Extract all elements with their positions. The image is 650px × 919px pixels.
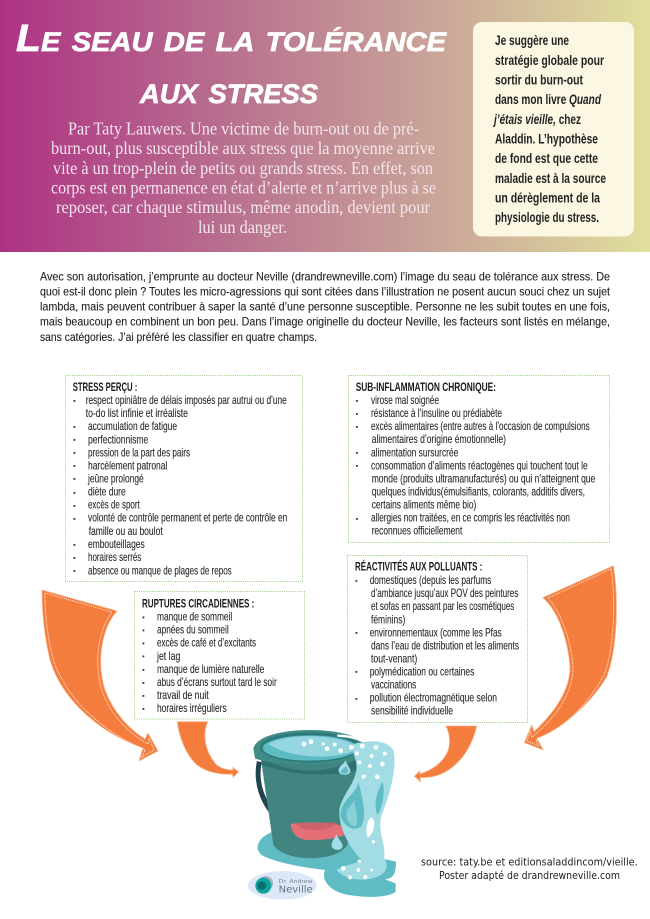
intro text: vite à un trop-plein de petits ou grands stress. En effet, son xyxy=(53,158,433,178)
panel: réactivités aux polluants xyxy=(348,556,528,722)
paragraph: sans catégories. J’ai préféré les classifier en quatre champs. xyxy=(40,330,317,344)
panel: ruptures circadiennes: excès de café et d’excitants xyxy=(157,636,256,650)
source credit: Poster adapté de drandrewneville.com xyxy=(439,870,620,882)
callout: book: de fond est que cette xyxy=(495,150,598,166)
panel: sub-inflammation chronique: alimentation sursurcrée xyxy=(371,445,459,459)
callout: book: maladie est à la source xyxy=(495,170,606,186)
panel: ruptures circadiennes: jet lag xyxy=(156,649,180,663)
source credit: source: taty.be et editionsaladdincom/vieille. xyxy=(421,857,638,869)
panel: ruptures circadiennes: apnées du sommeil xyxy=(157,623,229,637)
title: aux stress xyxy=(139,70,318,112)
source credit xyxy=(421,857,638,882)
panel: stress perçu: pression de la part des pairs xyxy=(88,445,190,459)
pink band xyxy=(291,822,347,840)
arrow: left large xyxy=(42,590,158,761)
panel: sub-inflammation chronique: certains aliments même bio) xyxy=(372,498,476,512)
panel: réactivités aux polluants: tout-venant) xyxy=(371,651,417,665)
arrow: right large xyxy=(524,566,616,750)
panel: réactivités aux polluants: RÉACTIVITÉS AUX POLLUANTS : xyxy=(355,559,482,574)
panel: stress perçu: respect opiniâtre de délais imposés par autrui ou d’une xyxy=(86,393,287,407)
panel: sub-inflammation chronique: SUB-INFLAMMATION CHRONIQUE: xyxy=(356,380,496,394)
panel: réactivités aux polluants: domestiques (depuis les parfums xyxy=(370,573,491,587)
title: Le seau de la tolérance xyxy=(16,18,447,60)
panel: stress perçu: jeûne prolongé xyxy=(87,471,144,485)
logo: Dr. Andrew Neville: Dr. Andrew xyxy=(279,879,313,885)
panel: stress perçu: perfectionnisme xyxy=(88,432,149,446)
panel: ruptures circadiennes: abus d’écrans surtout tard le soir xyxy=(157,675,277,689)
panel: stress perçu: horaires serrés xyxy=(88,550,141,564)
panel: stress perçu: embouteillages xyxy=(88,537,145,551)
panel: réactivités aux polluants: environnementaux (comme les Pfas xyxy=(370,625,502,639)
logo: Dr. Andrew Neville xyxy=(248,871,317,900)
callout: book: stratégie globale pour xyxy=(495,52,604,68)
intro text xyxy=(51,118,436,237)
logo: Dr. Andrew Neville: Neville xyxy=(279,884,313,895)
callout: book: physiologie du stress. xyxy=(495,209,599,225)
callout: book xyxy=(473,22,634,236)
panel: sub-inflammation chronique: reconnues officiellement xyxy=(372,524,463,538)
panel: réactivités aux polluants: d’ambiance jusqu’aux POV des peintures xyxy=(371,586,518,600)
panel: stress perçu: accumulation de fatigue xyxy=(88,419,177,433)
foam bubbles xyxy=(302,739,387,879)
callout: book: Je suggère une xyxy=(495,32,569,48)
callout: book: sortir du burn-out xyxy=(495,72,583,88)
panel: stress perçu: absence ou manque de plages de repos xyxy=(88,563,232,577)
panel: réactivités aux polluants: vaccinations xyxy=(371,678,416,692)
panel: stress perçu: diète dure xyxy=(88,485,126,499)
callout: book: Aladdin. L’hypothèse xyxy=(495,130,598,146)
paragraph xyxy=(40,269,611,344)
panel: stress perçu: excès de sport xyxy=(88,498,140,512)
arrow: left small xyxy=(177,722,239,777)
arrow: right small xyxy=(414,726,477,782)
panel: sub-inflammation chronique xyxy=(348,376,610,542)
callout: book: dans mon livre Quand xyxy=(495,91,601,107)
rim xyxy=(253,730,367,764)
paragraph: Avec son autorisation, j’emprunte au docteur Neville (drandrewneville.com) l’image du seau de tolérance aux stress. De xyxy=(40,269,610,283)
panel: stress perçu: to-do list infinie et irréaliste xyxy=(86,406,188,420)
panel: réactivités aux polluants: sensibilité individuelle xyxy=(371,704,453,718)
panel: ruptures circadiennes: manque de sommeil xyxy=(157,610,232,624)
intro text: corps est en permanence en état d’alerte et n’arrive plus à se xyxy=(51,178,436,198)
callout: book: un dérèglement de la xyxy=(495,190,600,206)
panel: ruptures circadiennes xyxy=(134,592,304,719)
intro text: Par Taty Lauwers. Une victime de burn-out ou de pré- xyxy=(68,118,419,138)
panel: ruptures circadiennes: RUPTURES CIRCADIENNES : xyxy=(142,596,254,610)
panel: stress perçu: harcèlement patronal xyxy=(88,458,167,472)
icon: overflowing bucket xyxy=(248,730,396,900)
panel: stress perçu xyxy=(66,376,302,582)
intro text: burn-out, plus susceptible aux stress que la moyenne arrive xyxy=(51,138,435,158)
intro text: lui un danger. xyxy=(198,217,287,237)
puddle xyxy=(258,830,396,897)
panel: stress perçu: famille ou au boulot xyxy=(89,524,163,538)
panel: réactivités aux polluants: féminins) xyxy=(371,612,405,626)
intro text: reposer, car chaque stimulus, même anodin, devient pour xyxy=(56,197,430,217)
panel: ruptures circadiennes: horaires irréguliers xyxy=(157,701,227,715)
panel: réactivités aux polluants: et sofas en passant par les cosmétiques xyxy=(371,599,514,613)
panel: stress perçu: volonté de contrôle permanent et perte de contrôle en xyxy=(88,511,287,525)
bucket body xyxy=(261,757,361,858)
panel: ruptures circadiennes: travail de nuit xyxy=(157,688,209,702)
panel: ruptures circadiennes: manque de lumière naturelle xyxy=(157,662,265,676)
panel: sub-inflammation chronique: virose mal soignée xyxy=(371,393,439,407)
callout: book: j’étais vieille, chez xyxy=(493,111,581,127)
panel: stress perçu: STRESS PERÇU : xyxy=(73,380,137,394)
panel: sub-inflammation chronique: alimentaires d’origine émotionnelle) xyxy=(372,432,506,446)
drops xyxy=(339,760,350,775)
overflowing water xyxy=(337,741,395,880)
handle xyxy=(258,762,293,828)
panel: réactivités aux polluants: polymédication ou certaines xyxy=(370,665,474,679)
panel: réactivités aux polluants: dans l’eau de distribution et les aliments xyxy=(371,638,519,652)
panel: sub-inflammation chronique: résistance à l’insuline ou prédiabète xyxy=(371,406,502,420)
panel: réactivités aux polluants: pollution électromagnétique selon xyxy=(370,691,497,705)
header banner xyxy=(0,0,650,252)
title xyxy=(16,18,447,112)
paragraph: lambda, mais peuvent contribuer à saper la santé d’une personne susceptible. Personne ne les subit toutes en une fois, xyxy=(40,300,610,314)
